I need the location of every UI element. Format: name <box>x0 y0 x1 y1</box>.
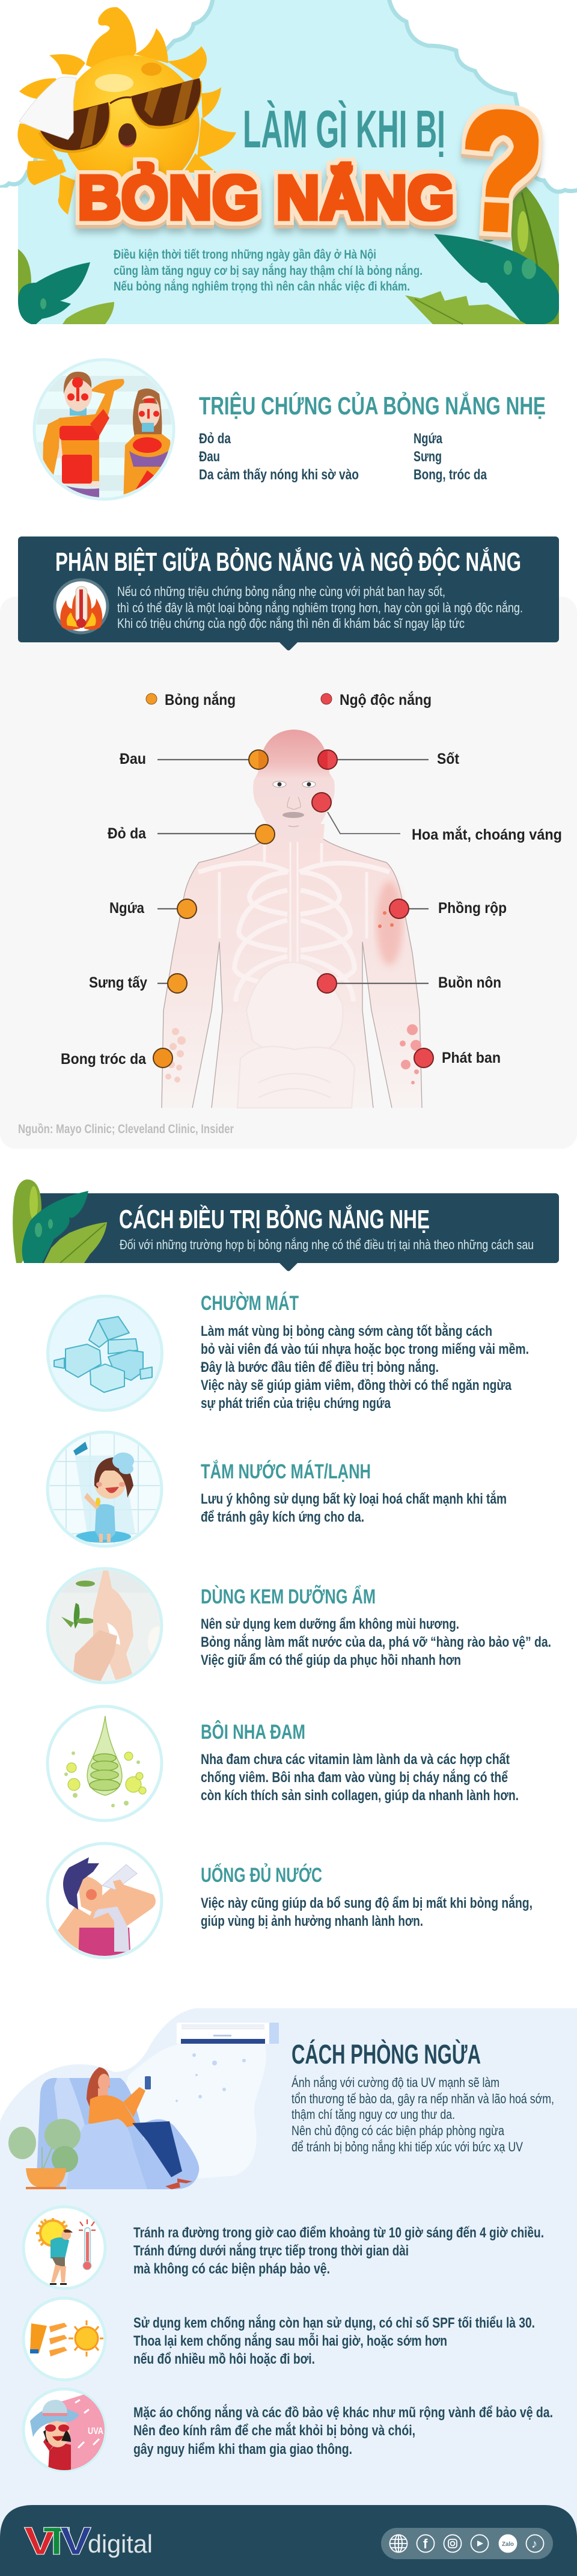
body labels: Sốt <box>437 751 460 767</box>
illustration: woman with air conditioner <box>8 2023 279 2189</box>
tip text <box>133 2314 535 2367</box>
heading: TẮM NƯỚC MÁT/LẠNH <box>201 1460 371 1483</box>
sunglasses <box>38 78 202 153</box>
text <box>201 1490 507 1525</box>
marker: Sưng tấy <box>168 974 187 993</box>
symptom list left: Đỏ da <box>199 431 231 447</box>
symptom list left: Đau <box>199 449 220 465</box>
banner title: CÁCH ĐIỀU TRỊ BỎNG NẮNG NHẸ <box>119 1203 430 1234</box>
icon: aloe drop <box>47 1706 162 1821</box>
prevention text: Ánh nắng với cường độ tia UV mạnh sẽ làm <box>292 2075 499 2090</box>
hero intro text: cũng làm tăng nguy cơ bị say nắng hay thậm chí là bỏng nắng. <box>114 263 423 278</box>
tip text: Thoa lại kem chống nắng sau mỗi hai giờ, hoặc sớm hơn <box>133 2332 447 2349</box>
question mark: ? <box>456 77 546 265</box>
marker: Đau <box>249 750 268 769</box>
legend: Bỏng nắng <box>165 690 236 709</box>
rash patches <box>165 881 421 1084</box>
tip: protective clothing <box>23 2389 553 2472</box>
marker: Buồn nôn <box>317 974 337 993</box>
icon: hands applying cream <box>47 1569 167 1684</box>
tip: sunscreen <box>23 2298 535 2380</box>
body silhouette <box>162 824 422 1108</box>
symptom list right: Sưng <box>414 449 442 465</box>
body labels: Sưng tấy <box>89 974 147 991</box>
text: Việc giữ ẩm có thể giúp da phục hồi nhanh hơn <box>201 1652 461 1668</box>
body labels: Đỏ da <box>108 825 147 842</box>
text <box>201 1616 551 1668</box>
icon: sun character <box>17 7 236 215</box>
icon: woman with hat and UV shield <box>23 2389 111 2472</box>
prevention text: để tránh bị bỏng nắng khi tiếp xúc với bức xạ UV <box>292 2139 523 2154</box>
banner paragraph: Nếu có những triệu chứng bỏng nắng nhẹ cùng với phát ban hay sốt, <box>117 584 445 599</box>
body labels: Bong tróc da <box>61 1051 147 1068</box>
banner paragraph: Khi có triệu chứng của ngộ độc nắng thì nên đi khám bác sĩ ngay lập tức <box>117 616 465 631</box>
text <box>201 1323 529 1412</box>
footer bar <box>0 2505 577 2576</box>
tip text: gây nguy hiểm khi tham gia giao thông. <box>133 2441 352 2458</box>
marker: Sốt <box>318 750 337 769</box>
section: treatment <box>13 1179 559 1964</box>
icon: sunscreen and sun <box>23 2298 105 2380</box>
social icons: Zalo <box>502 2541 514 2548</box>
marker: Bong tróc da <box>153 1048 172 1068</box>
gray panel background <box>0 597 577 1149</box>
marker: Phát ban <box>414 1048 433 1068</box>
icon: thermometer in flames <box>55 580 108 633</box>
plant <box>8 2119 81 2189</box>
heading: UỐNG ĐỦ NƯỚC <box>201 1863 322 1887</box>
icon: woman with hat and UV shield: UVA <box>88 2426 103 2436</box>
left margin cover <box>0 188 18 325</box>
prevention text <box>292 2075 554 2154</box>
heading: DÙNG KEM DƯỠNG ẨM <box>201 1585 376 1608</box>
logo: T <box>43 2519 70 2563</box>
icon: man in heat <box>23 2207 105 2289</box>
sun body <box>61 55 200 194</box>
body diagram <box>162 730 422 1108</box>
logo: V <box>60 2519 91 2563</box>
symptom list right: Bong, tróc da <box>414 467 487 483</box>
marker: Đỏ da <box>255 825 275 844</box>
section: prevention <box>0 2008 577 2538</box>
icon: child in shower <box>47 1431 162 1546</box>
hero leaves left <box>18 249 114 324</box>
abdomen organs <box>237 962 355 1108</box>
prevention text: Nên chủ động có các biện pháp phòng ngừa <box>292 2123 505 2138</box>
text: để tránh gây kích ứng cho da. <box>201 1509 364 1525</box>
footer <box>0 2505 577 2576</box>
heading: CHƯỜM MÁT <box>201 1292 299 1315</box>
body labels: Hoa mắt, choáng váng <box>412 825 562 843</box>
body labels: Ngứa <box>109 900 145 917</box>
legend: Ngộ độc nắng <box>340 690 432 709</box>
section: mild symptoms <box>33 360 546 505</box>
callout lines <box>157 760 429 983</box>
symptom list right <box>414 431 487 483</box>
marker: Hoa mắt <box>312 793 331 812</box>
body labels: Đau <box>120 751 146 767</box>
tip text: nếu đổ nhiều mồ hôi hoặc đi bơi. <box>133 2351 315 2367</box>
woman <box>87 2067 192 2189</box>
mouth <box>118 123 136 147</box>
body labels <box>61 751 562 1068</box>
face <box>273 781 316 826</box>
right cloud <box>388 0 577 192</box>
logo: digital <box>88 2530 153 2558</box>
tip text <box>133 2225 544 2277</box>
text: giúp vùng bị ảnh hưởng nhanh lành hơn. <box>201 1913 423 1929</box>
hero intro text: Điều kiện thời tiết trong những ngày gần đây ở Hà Nội <box>114 248 376 262</box>
text: Lưu ý không sử dụng bất kỳ loại hoá chất mạnh khi tắm <box>201 1490 507 1507</box>
hero leaves right <box>405 178 559 324</box>
legend <box>146 690 432 709</box>
tip text: Nên đeo kính râm để che mắt khỏi bị bỏng và chói, <box>133 2422 415 2439</box>
section: sunburn vs sun poisoning <box>0 536 577 1149</box>
armchair front cushion <box>66 2119 147 2189</box>
hero title line 2: BỎNG NẮNG <box>78 162 454 232</box>
icon: ice cubes <box>48 1296 162 1410</box>
text: Nên sử dụng kem dưỡng ẩm không mùi hương. <box>201 1616 459 1632</box>
banner paragraph <box>117 584 523 631</box>
banner: treatment heading <box>13 1179 559 1271</box>
text: Đây là bước đầu tiên để điều trị bỏng nắng. <box>201 1359 439 1376</box>
heading: BÔI NHA ĐAM <box>201 1720 305 1744</box>
ribs and skeleton <box>198 842 389 1016</box>
icon: man drinking water <box>47 1843 162 1964</box>
item: moisturizer <box>47 1569 551 1684</box>
text: chống viêm. Bôi nha đam vào vùng bị cháy nắng có thể <box>201 1769 508 1786</box>
towel <box>19 77 76 140</box>
sun rays <box>17 7 236 215</box>
left cloud <box>0 0 213 188</box>
item: cool shower <box>47 1431 507 1546</box>
text: Việc này sẽ giúp giảm viêm, đồng thời có thể ngăn ngừa <box>201 1377 512 1394</box>
item: aloe vera <box>47 1706 519 1821</box>
marker: Phồng rộp <box>389 899 409 918</box>
text: Nha đam chưa các vitamin làm lành da và các hợp chất <box>201 1751 510 1768</box>
symptom list left <box>199 431 359 483</box>
text: Làm mát vùng bị bỏng càng sớm càng tốt bằng cách <box>201 1323 492 1339</box>
text <box>201 1895 533 1929</box>
marker: Ngứa <box>177 899 197 918</box>
prevention background <box>0 2008 577 2538</box>
cool air blob <box>120 2044 266 2178</box>
logo <box>24 2519 153 2563</box>
hero intro text <box>114 248 423 294</box>
air conditioner <box>176 2023 279 2102</box>
social icons <box>381 2528 553 2559</box>
head <box>253 730 335 840</box>
logo: V <box>24 2519 56 2563</box>
item: drink water <box>47 1843 533 1964</box>
social icons: ♪ <box>531 2538 537 2551</box>
tip text: Tránh đứng dưới nắng trực tiếp trong thời gian dài <box>133 2242 409 2259</box>
prevention heading: CÁCH PHÒNG NGỪA <box>292 2039 481 2070</box>
source note: Nguồn: Mayo Clinic; Cleveland Clinic, Insider <box>18 1122 234 1136</box>
hero panel background <box>18 0 559 324</box>
body labels: Phồng rộp <box>438 900 507 917</box>
prevention text: thậm chí tăng nguy cơ ung thư da. <box>292 2107 455 2122</box>
text <box>201 1751 519 1804</box>
hero section <box>0 0 577 325</box>
item: cold compress <box>48 1292 529 1412</box>
body labels: Phát ban <box>442 1050 501 1066</box>
text: sự phát triển của triệu chứng ngứa <box>201 1395 391 1412</box>
tip text: mà không có các biện pháp bảo vệ. <box>133 2261 330 2277</box>
icon: sunburned couple <box>33 360 177 505</box>
tip: avoid peak hours <box>23 2207 544 2289</box>
banner leaves <box>13 1179 107 1263</box>
hero intro text: Nếu bỏng nắng nghiêm trọng thì nên cân nhắc việc đi khám. <box>114 279 410 294</box>
banner: distinguish heading <box>18 536 559 651</box>
armchair <box>36 2078 150 2189</box>
social icons: f <box>423 2536 428 2551</box>
symptom list right: Ngứa <box>414 431 442 447</box>
symptom list left: Da cảm thấy nóng khi sờ vào <box>199 467 359 483</box>
body labels: Buồn nôn <box>438 974 501 991</box>
tip text <box>133 2404 553 2458</box>
